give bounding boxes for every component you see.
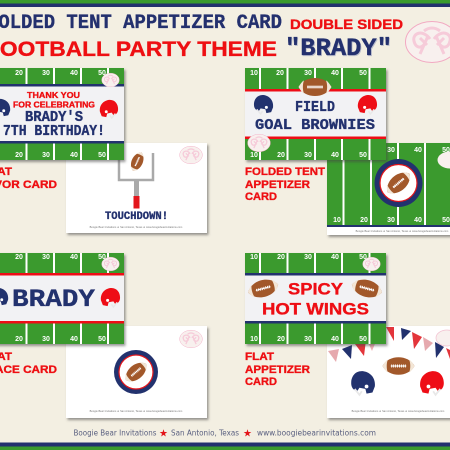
- title: [0, 12, 403, 64]
- text: brady: BRADY: [12, 285, 95, 314]
- yard numbers: 10: [250, 152, 258, 159]
- yard numbers: 30: [42, 254, 50, 261]
- logo: [102, 73, 119, 87]
- panel: place card front: [0, 253, 124, 344]
- footer text: ★: [159, 428, 168, 440]
- footer text: www.boogiebearinvitations.com: [257, 428, 376, 438]
- yard numbers: 30: [387, 217, 395, 224]
- yard numbers: 30: [387, 147, 395, 154]
- icon: football right: [350, 276, 384, 301]
- text: hot wings: HOT WINGS: [262, 300, 369, 318]
- yard numbers: 20: [15, 70, 23, 77]
- text: brady's: BRADY'S: [25, 109, 83, 126]
- label: flat appetizer card: FLAT: [245, 351, 274, 363]
- footer text: [74, 428, 376, 440]
- heading: brady: "BRADY": [285, 34, 392, 63]
- footer text: ★: [243, 428, 252, 440]
- yard numbers: 30: [42, 336, 50, 343]
- heading: double sided: DOUBLE SIDED: [290, 16, 403, 32]
- yard numbers: 50: [359, 254, 367, 261]
- logo: [438, 152, 450, 168]
- icon: navy helmet: [254, 95, 273, 114]
- yard numbers: [333, 147, 450, 224]
- label: folded tent appetizer card: [245, 166, 325, 203]
- logo: [436, 330, 450, 346]
- label: folded tent appetizer card: CARD: [245, 191, 277, 203]
- yard numbers: 20: [15, 336, 23, 343]
- yard numbers: 20: [277, 152, 285, 159]
- label: flat place card: [0, 351, 57, 376]
- yard numbers: 30: [304, 152, 312, 159]
- yard numbers: 40: [70, 254, 78, 261]
- icon: red helmet: [101, 288, 120, 307]
- text: spicy: SPICY: [288, 280, 344, 298]
- top border: [0, 0, 450, 7]
- text: credit: Boogie Bear Invitations ★ San Antonio, Texas ★ www.boogiebearinvitations.com: [356, 229, 448, 233]
- yard numbers: 40: [331, 70, 339, 77]
- yard numbers: 40: [70, 70, 78, 77]
- yard numbers: 10: [333, 217, 341, 224]
- text: for celebrating: FOR CELEBRATING: [13, 100, 95, 110]
- text: credit: Boogie Bear Invitations ★ San Antonio, Texas ★ www.boogiebearinvitations.com: [90, 225, 182, 229]
- icon: football left: [246, 276, 280, 301]
- yard numbers: 20: [277, 254, 285, 261]
- yard numbers: 40: [70, 152, 78, 159]
- icon: navy helmet: [351, 371, 375, 395]
- label: folded tent appetizer card: APPETIZER: [245, 179, 310, 191]
- label: flat appetizer card: CARD: [245, 376, 277, 388]
- logo: [248, 134, 270, 152]
- text: goal brownies: GOAL BROWNIES: [255, 117, 375, 134]
- label: flat appetizer card: APPETIZER: [245, 364, 310, 376]
- yard numbers: 10: [250, 254, 258, 261]
- logo: [180, 330, 202, 348]
- logo: [102, 257, 119, 271]
- icon: navy helmet: [0, 288, 8, 306]
- yard numbers: [250, 70, 367, 159]
- label: folded tent appetizer card: FOLDED TENT: [245, 166, 325, 178]
- yard numbers: [15, 70, 106, 159]
- yard numbers: 50: [98, 70, 106, 77]
- yard numbers: 30: [42, 152, 50, 159]
- yard numbers: 40: [331, 254, 339, 261]
- yard numbers: 40: [331, 336, 339, 343]
- yard numbers: 20: [15, 254, 23, 261]
- logo: top right: [406, 22, 450, 62]
- bottom border: [0, 442, 450, 450]
- icon: football: [382, 357, 415, 375]
- yard numbers: 50: [359, 152, 367, 159]
- footer text: San Antonio, Texas: [171, 428, 239, 438]
- panel: appetizer card back: [327, 326, 450, 418]
- icon: red helmet: [358, 95, 377, 114]
- panel: folded tent front: [245, 68, 386, 160]
- panel: place card back: [66, 326, 207, 418]
- yard numbers: 10: [250, 70, 258, 77]
- yard numbers: 20: [360, 217, 368, 224]
- yard numbers: 30: [304, 254, 312, 261]
- yard numbers: [250, 254, 367, 343]
- yard numbers: 30: [42, 70, 50, 77]
- logo: [180, 146, 202, 164]
- yard numbers: 50: [98, 254, 106, 261]
- label: flat favor card: [0, 166, 57, 191]
- icon: red helmet: [420, 371, 444, 395]
- logo: [363, 257, 380, 271]
- yard numbers: 50: [359, 70, 367, 77]
- text: credit: Boogie Bear Invitations ★ San Antonio, Texas ★ www.boogiebearinvitations.com: [90, 409, 182, 413]
- yard numbers: [15, 254, 106, 343]
- heading: brady shadow: "BRADY": [286, 35, 393, 64]
- icon: football: [128, 150, 147, 173]
- icon: navy helmet: [0, 99, 10, 117]
- panel: folded tent back: [327, 143, 450, 235]
- yard numbers: 50: [359, 336, 367, 343]
- yard numbers: 50: [442, 217, 450, 224]
- yard numbers: 50: [442, 147, 450, 154]
- yard numbers: 50: [98, 336, 106, 343]
- yard numbers: 20: [277, 336, 285, 343]
- yard numbers: 40: [414, 147, 422, 154]
- panel: favor card front: [0, 68, 124, 160]
- text: field: FIELD: [295, 99, 335, 116]
- yard numbers: 30: [304, 70, 312, 77]
- yard numbers: 20: [15, 152, 23, 159]
- label: flat appetizer card: [245, 351, 310, 388]
- icon: red helmet: [100, 100, 118, 118]
- icon: football: [298, 78, 332, 96]
- text: thank you: THANK YOU: [27, 90, 80, 100]
- yard numbers: 20: [276, 70, 284, 77]
- icon: football badge: [114, 350, 158, 394]
- yard numbers: 40: [331, 152, 339, 159]
- yard numbers: 40: [414, 217, 422, 224]
- text: birthday: 7TH BIRTHDAY!: [3, 123, 105, 140]
- yard numbers: 40: [70, 336, 78, 343]
- panel: appetizer card front: [245, 253, 386, 344]
- icon: goal post: [119, 153, 153, 208]
- yard numbers: 50: [98, 152, 106, 159]
- icon: football badge: [374, 159, 422, 207]
- footer text: Boogie Bear Invitations: [74, 428, 157, 438]
- yard numbers: 10: [250, 336, 258, 343]
- bunting: [328, 327, 450, 362]
- yard numbers: 30: [304, 336, 312, 343]
- text: credit: Boogie Bear Invitations ★ San Antonio, Texas ★ www.boogiebearinvitations.com: [352, 409, 444, 413]
- panel: favor card back: [66, 143, 207, 233]
- text: touchdown: TOUCHDOWN!: [105, 211, 168, 223]
